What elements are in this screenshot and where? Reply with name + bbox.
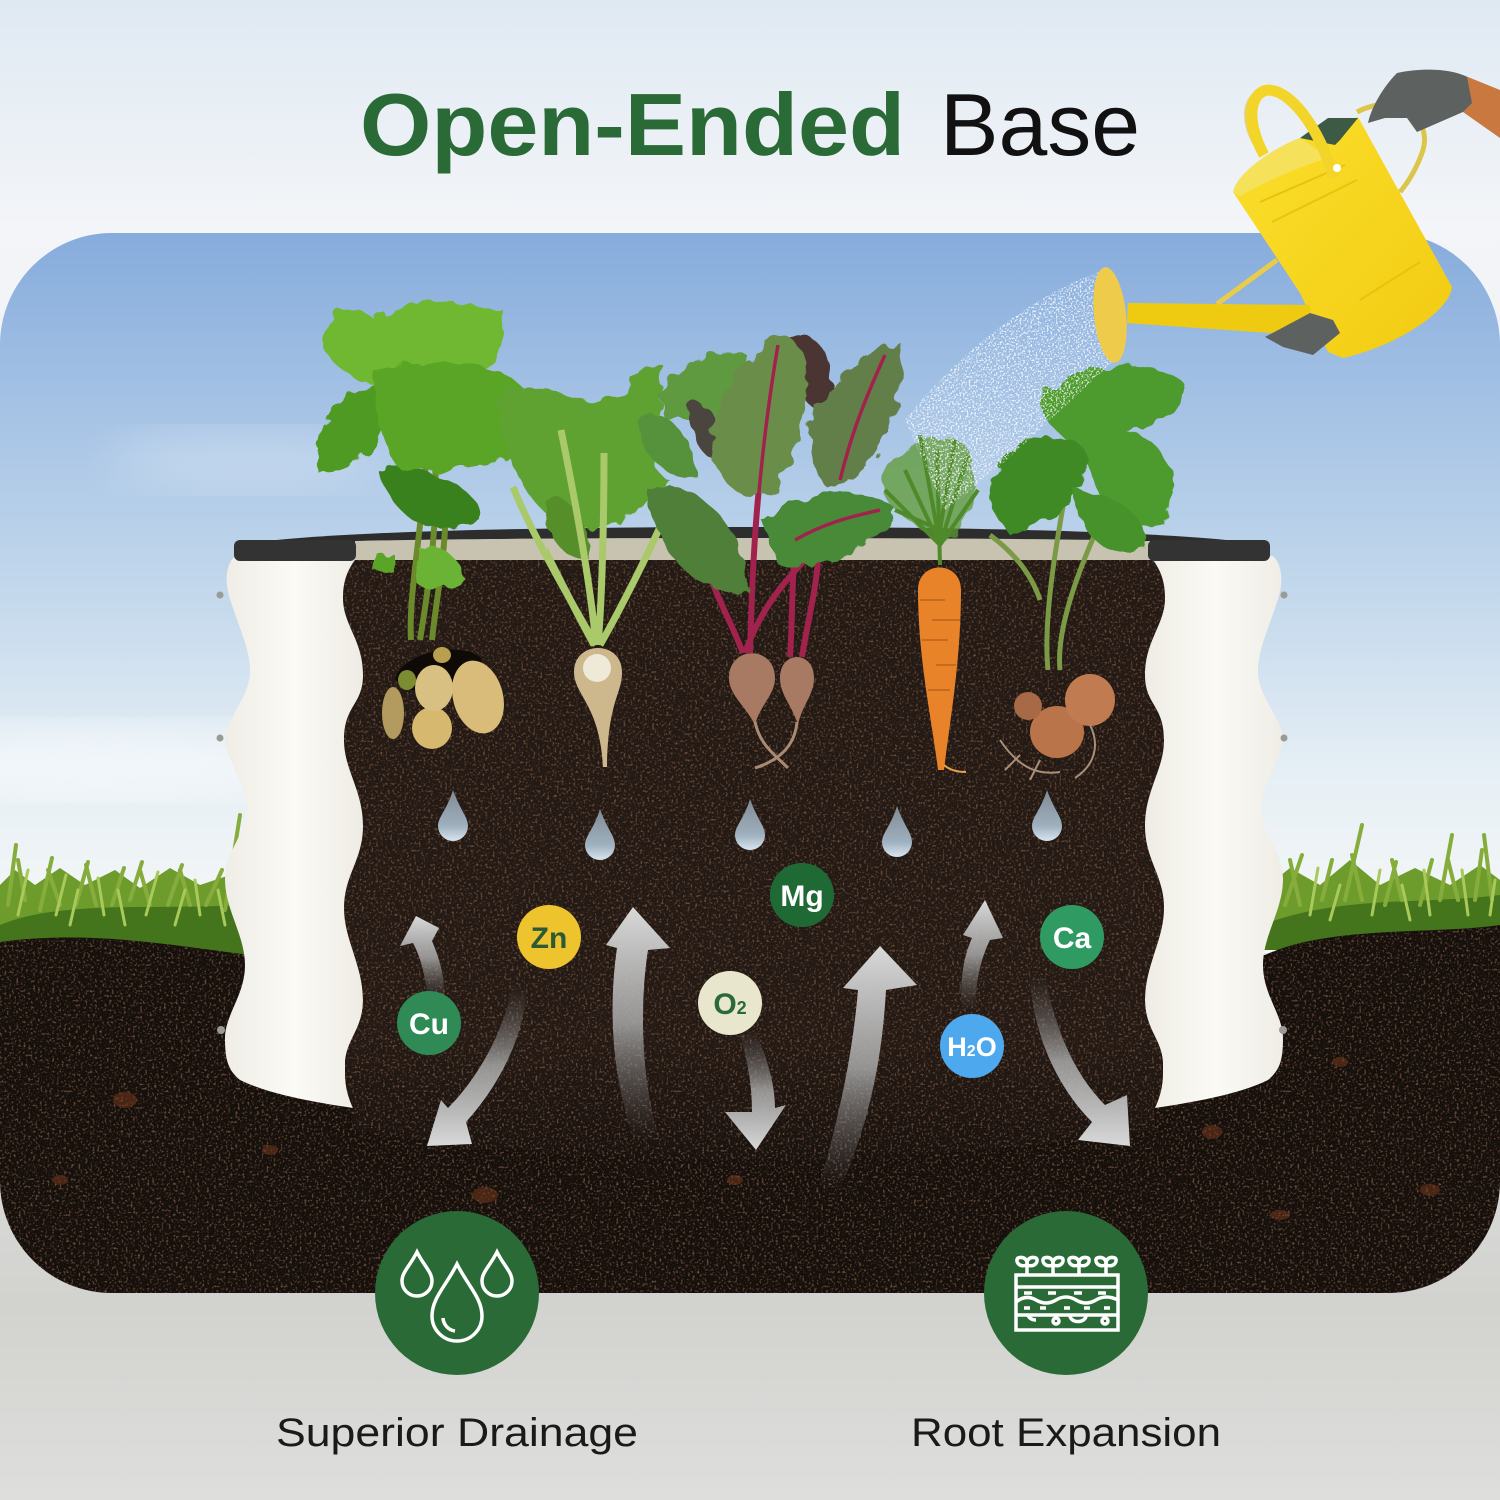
panel: plants	[317, 301, 1185, 780]
badge: Zn: Zn	[531, 922, 567, 955]
ground soil	[0, 925, 1500, 1293]
icon: drop 1	[438, 790, 468, 841]
label: Superior Drainage	[276, 1411, 638, 1455]
badge: Mg: Mg	[780, 880, 824, 913]
plant: beets	[636, 335, 902, 768]
badge: H2O: H2O	[947, 1032, 997, 1062]
icon: drop 3	[735, 799, 765, 850]
plant: carrot	[880, 435, 978, 772]
icon: water drops	[375, 1211, 539, 1375]
reddish soil specks	[52, 1057, 1440, 1220]
water spray	[905, 270, 1120, 510]
badge: Ca	[1040, 905, 1104, 969]
carrot root	[918, 568, 961, 770]
title	[360, 75, 1140, 174]
wall bolts	[216, 592, 1288, 1034]
icon: soil layers with seedlings	[984, 1211, 1148, 1375]
spout and brace	[1127, 303, 1312, 333]
back rim	[240, 527, 1265, 552]
panel: garden scene	[0, 233, 1500, 1293]
can body	[1233, 117, 1452, 358]
front rim left	[234, 540, 356, 561]
gloves and arm	[1463, 75, 1500, 138]
left bed wall	[225, 556, 363, 1108]
soil cross-section	[343, 560, 1165, 1160]
interior band	[355, 538, 1150, 570]
icon: watering can	[1089, 70, 1500, 364]
badge: Cu: Cu	[409, 1008, 449, 1041]
badge: O2: O2	[713, 988, 747, 1021]
badge: Ca: Ca	[1053, 922, 1091, 955]
turnip root	[574, 648, 622, 767]
arrow: down left	[427, 985, 527, 1146]
sky	[0, 233, 1500, 953]
can lid	[1233, 138, 1330, 196]
grass	[0, 815, 1500, 960]
rose	[1089, 266, 1131, 364]
beet roots	[729, 653, 814, 725]
badge: Zn	[517, 905, 581, 969]
potatoes left	[382, 647, 512, 749]
panel: flow arrows	[400, 900, 1130, 1190]
arrow: down right	[1030, 975, 1130, 1146]
plant: potato left	[317, 301, 545, 640]
badge: O2	[698, 971, 762, 1035]
plant: turnip	[498, 364, 670, 767]
icon: drop 5	[1032, 790, 1062, 841]
badge: H2O	[940, 1014, 1004, 1078]
arrow: up right small	[961, 900, 1003, 1010]
label: Root Expansion	[911, 1411, 1221, 1455]
panel: raised bed	[216, 527, 1288, 1160]
arrow: down center	[725, 1030, 786, 1150]
badge: Cu	[397, 991, 461, 1055]
feature: superior drainage	[276, 1211, 638, 1455]
arrow: up center right	[818, 946, 917, 1190]
potatoes right	[1030, 706, 1084, 758]
panel: nutrient badges	[397, 863, 1104, 1078]
feature: root expansion	[911, 1211, 1221, 1455]
icon: drop 2	[585, 809, 615, 860]
arrow: up center left	[606, 907, 670, 1140]
title: Base	[940, 75, 1140, 174]
icon: drop 4	[882, 806, 912, 857]
plant: potato right	[990, 366, 1185, 780]
badge: Mg	[770, 863, 834, 927]
right bed wall	[1145, 556, 1283, 1108]
panel: water drops	[438, 790, 1062, 860]
handle far side	[1246, 92, 1262, 155]
top handle	[1252, 90, 1334, 178]
title: Open-Ended	[360, 75, 905, 174]
back handle	[1357, 104, 1425, 192]
front rim right	[1148, 540, 1270, 561]
arrow: up left small	[400, 916, 445, 1000]
can opening	[1300, 118, 1358, 145]
